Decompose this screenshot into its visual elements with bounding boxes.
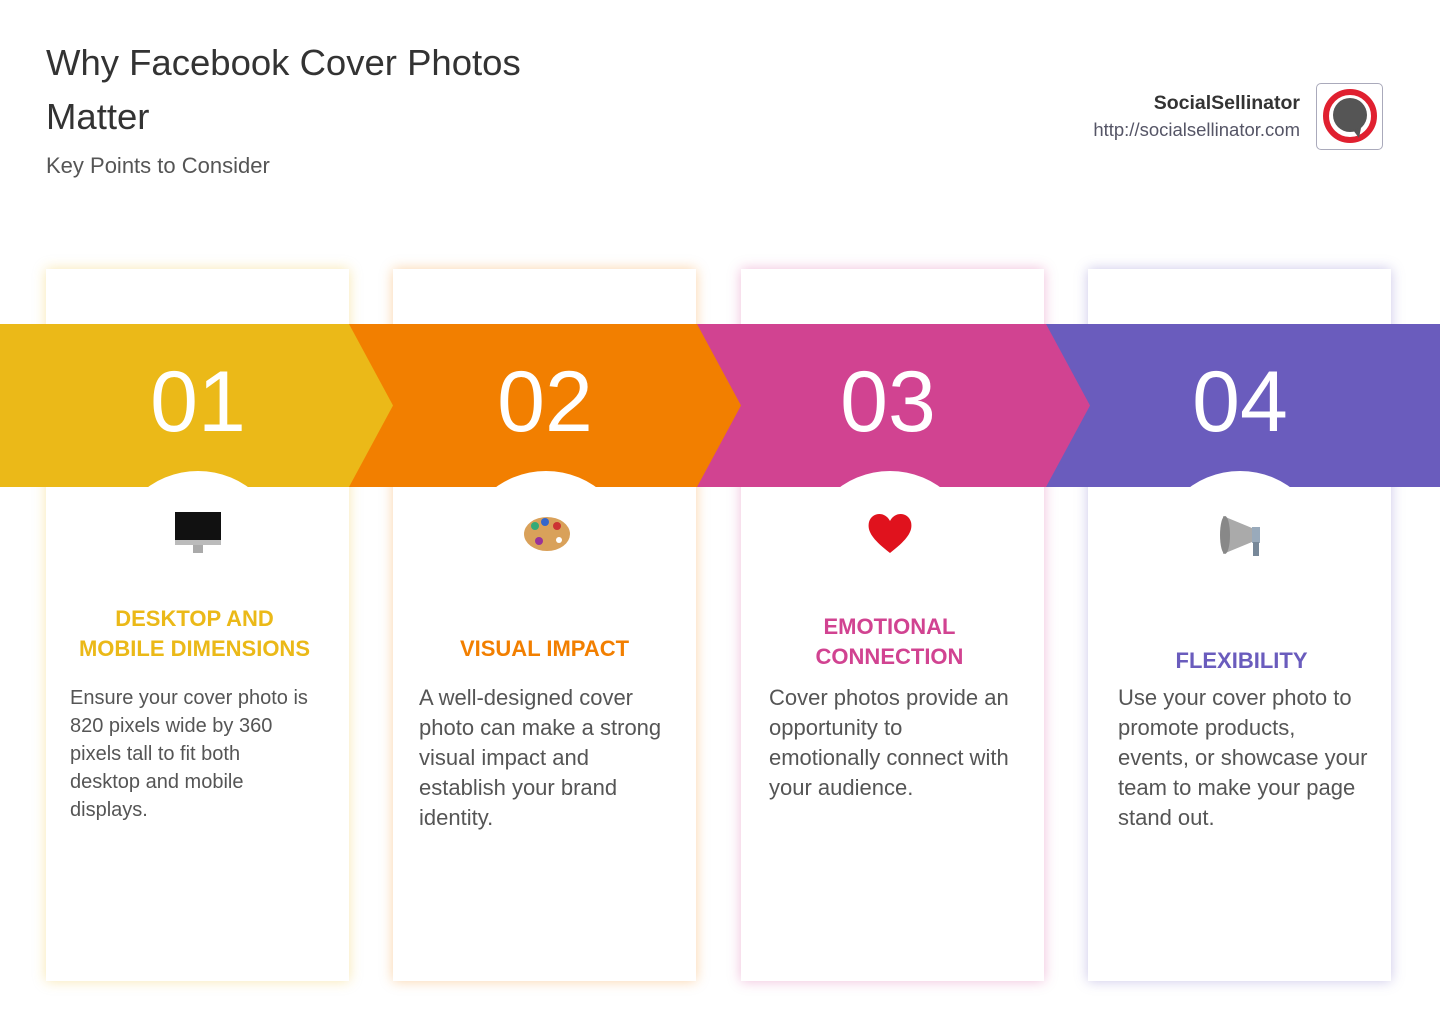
text: 04 <box>1192 354 1288 450</box>
text: A well-designed cover photo can make a strong visual impact and establish your brand identity. <box>419 685 661 830</box>
title <box>46 42 521 137</box>
text: 03 <box>840 354 936 450</box>
panel 1 text: MOBILE DIMENSIONS <box>79 636 310 661</box>
panel 2 text: VISUAL IMPACT <box>460 636 629 661</box>
icon: megaphone <box>1220 516 1260 556</box>
panel 3 text: CONNECTION <box>816 644 963 669</box>
brand text: SocialSellinator <box>1154 92 1300 114</box>
numbers: 01 <box>150 354 246 450</box>
panel 1 text <box>79 606 310 661</box>
panel 1 text: DESKTOP AND <box>115 606 274 631</box>
brand text: http://socialsellinator.com <box>1093 119 1300 140</box>
cards <box>46 269 349 981</box>
brand text <box>1093 92 1300 140</box>
text: Cover photos provide an opportunity to emotionally connect with your audience. <box>769 685 1009 800</box>
title: Matter <box>46 96 149 137</box>
chevron band <box>0 324 1440 487</box>
brand <box>1093 83 1383 150</box>
icon: monitor <box>175 512 221 553</box>
panel 3 text <box>816 614 963 669</box>
text: Ensure your cover photo is 820 pixels wide by 360 pixels tall to fit both desktop and mobile displays. <box>70 687 308 821</box>
icon: logo <box>1316 83 1383 150</box>
text: Use your cover photo to promote products, events, or showcase your team to make your page stand out. <box>1118 685 1367 830</box>
icon: heart <box>868 514 912 553</box>
panel 3 text: EMOTIONAL <box>824 614 956 639</box>
subtitle: Key Points to Consider <box>46 153 270 178</box>
title: Why Facebook Cover Photos <box>46 42 521 83</box>
text: 02 <box>497 354 593 450</box>
panel 4 text: FLEXIBILITY <box>1176 648 1308 673</box>
icon: palette <box>524 517 570 551</box>
